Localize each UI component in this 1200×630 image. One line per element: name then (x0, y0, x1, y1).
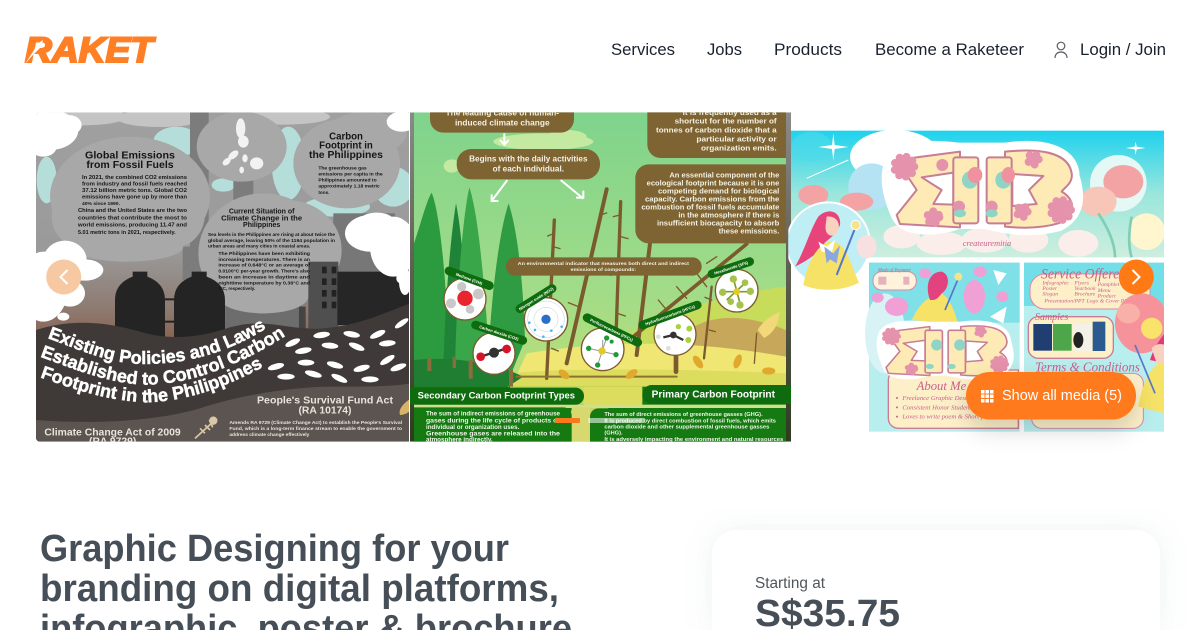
avatar (786, 201, 877, 290)
callout text: Begins with the daily activities (469, 154, 588, 163)
text block: secondary: atmosphere indirectly. (426, 437, 493, 444)
heading: current situation: 1°C, respectively. (218, 286, 255, 291)
heading: carbon footprint: Carbon (329, 131, 363, 142)
text block: secondary (414, 407, 572, 444)
heading: carbon footprint: Philippines amounted to (318, 178, 377, 183)
callout text: The leading cause of human- (446, 108, 559, 117)
molecule: nitrogen oxide (514, 283, 568, 341)
text block: primary: carbon dioxide and other supplemental greenhouse gasses (604, 425, 769, 431)
banner (791, 130, 1165, 257)
handle: createuremitia (963, 239, 1011, 248)
text block: secondary: individual or organization uses. (426, 424, 520, 431)
callout text: induced climate change (455, 118, 550, 127)
callout text: competing demand for biological (658, 187, 779, 195)
curved title: Existing Policies and Laws (48, 321, 265, 364)
clouds (444, 130, 593, 173)
poster: services: Menu (1097, 288, 1111, 294)
poster: services: Samples (1035, 312, 1068, 323)
heading: carbon footprint: emissions per capita in the (318, 171, 383, 176)
brown callouts (430, 112, 786, 276)
philippines map (221, 118, 263, 173)
molecule: carbon dioxide: Carbon dioxide (CO2) (479, 324, 520, 342)
heading: global emissions: countries that contribute the most to (78, 215, 188, 221)
curved title: Established to Control Carbon (40, 329, 286, 385)
buildings (299, 262, 411, 330)
heading: current situation: nighttime temperature by 0.36°C and (218, 280, 310, 285)
heading: global emissions: emissions have gone up by more than (82, 195, 188, 201)
bottom band (414, 387, 786, 442)
laws text: People's Survival Fund Act (257, 396, 394, 407)
poster: about me: About Me (916, 379, 967, 393)
callout text: of each individual. (493, 165, 564, 174)
forest (414, 187, 525, 387)
page title: Graphic Designing for your (40, 528, 509, 570)
callout text: An essential component of the (669, 171, 779, 179)
heading: current situation: Climate Change in the (221, 215, 302, 222)
molecule: methane (443, 265, 495, 320)
carousel progress (555, 418, 644, 423)
callout text: capacity. Carbon emissions from the (645, 195, 779, 203)
callout text: ecological footprint because it is one (647, 179, 779, 187)
callout text: in the atmosphere if there is (678, 211, 779, 219)
nav: services: Services (611, 40, 675, 59)
heading: global emissions: 5.01 metric tons in 2021, respectively. (78, 230, 176, 236)
page title: branding on digital platforms, (40, 568, 559, 610)
callout text: organization emits. (701, 143, 777, 152)
control: next arrow (1119, 260, 1154, 294)
molecule: sulfur hexafluoride: Hexafluoride (SF6) (714, 260, 749, 276)
heading: current situation: increasing temperatures. There is an (218, 257, 310, 262)
arrows (492, 133, 583, 201)
poster: about me: Mode of Payment (877, 268, 911, 273)
callout text: these emissions. (719, 227, 779, 235)
molecule: perfluorocarbons (581, 312, 644, 371)
price card (712, 530, 1160, 630)
callout text: combustion of fossil fuels accumulate (641, 203, 779, 211)
callout text: tonnes of carbon dioxide that a (656, 126, 777, 135)
laws text: (RA 9729) (89, 436, 136, 447)
poster: services: Flyers (1073, 280, 1090, 286)
molecule: perfluorocarbons: Perfluorocarbons (PFCs) (589, 317, 634, 343)
sparkles (818, 133, 1146, 161)
poster: services: Presentation/PPT (1043, 299, 1086, 305)
panel: climate poster (36, 112, 409, 442)
callout text (446, 108, 780, 273)
icon: fish bone (195, 417, 217, 438)
poster: services: Pamphlet (1097, 282, 1120, 288)
leaf (400, 399, 409, 415)
logo: sigma iota beta (889, 148, 1076, 228)
molecule: hydrofluorocarbons (637, 300, 703, 355)
poster: services: Yearbook (1074, 286, 1096, 292)
callout text: It is frequently used as a (683, 108, 777, 117)
icon: user (1055, 42, 1067, 58)
poster: services: Poster (1041, 286, 1058, 292)
lower band (36, 383, 410, 443)
heading: secondary types (403, 388, 584, 405)
curved title: Footprint in the Philippines (40, 360, 262, 403)
laws text: Fund, which is a long-term finance stream to enable the government to (229, 426, 402, 431)
laws text (44, 396, 402, 442)
poster: about me: Freelance Graphic Designer (901, 395, 979, 402)
nav: jobs: Jobs (707, 40, 742, 59)
poster: about me: Consistent Honor Student (902, 404, 971, 411)
poster: services: Product (1097, 293, 1116, 299)
flowers (798, 165, 1143, 217)
text block: primary (590, 408, 786, 443)
poster: services: Service Offered (1041, 266, 1127, 282)
text block: secondary: The sum of indirect emissions of greenhouse (426, 411, 560, 418)
panel: carbon footprint poster (403, 93, 799, 444)
heading: current situation: The Philippines have been exhibiting (218, 251, 310, 256)
callout text: particular activity or (696, 135, 777, 144)
heading: global emissions: 40% since 1990. (82, 201, 121, 207)
heading: carbon footprint (309, 131, 383, 195)
poster: about me (865, 263, 1020, 432)
heading: primary footprint: Primary Carbon Footprint (652, 389, 776, 400)
chimneys (183, 112, 253, 280)
navigation (611, 40, 1166, 59)
nav: products: Products (774, 40, 842, 59)
text block: primary: It is adversely impacting the environment and natural resources (604, 437, 783, 443)
heading: global emissions: In 2021, the combined CO2 emissions (82, 175, 187, 181)
laws text: (RA 10174) (298, 405, 352, 416)
poster: about me: Loves to write poem & Short fiction (901, 414, 998, 421)
nav: login: Login / Join (1080, 40, 1166, 59)
poster: services (1024, 263, 1168, 432)
text block: secondary: Greenhouse gases are released into the (426, 430, 561, 437)
poster: services: Slogan (1042, 292, 1058, 298)
dark wave (36, 303, 410, 443)
icon: grid (981, 390, 994, 402)
molecule: nitrogen oxide: Nitrogen oxide (NO2) (518, 286, 555, 311)
dead trees (517, 189, 757, 378)
heading: current situation: 0.0100°C per-year growth. There's also (218, 269, 310, 274)
text block: primary: (GHG). (604, 431, 623, 437)
poster: services: Brochure (1074, 292, 1096, 298)
heading: current situation: Current Situation of (229, 208, 295, 215)
white clouds (18, 110, 417, 322)
heading: carbon footprint: Footprint in (319, 141, 373, 152)
nav: become a raketeer: Become a Raketeer (875, 40, 1024, 59)
header logo: RAKET (25, 31, 156, 70)
page title (40, 528, 572, 630)
small logo (881, 324, 1010, 376)
molecule: methane: Methane (CH4) (455, 272, 484, 286)
callout text: An environmental indicator that measures both direct and indirect (518, 261, 689, 267)
molecule: hydrofluorocarbons: Hydrofluorocarbons (HFCs) (645, 304, 696, 326)
background hills (622, 286, 786, 344)
callout text: shortcut for the number of (675, 117, 777, 126)
text block: secondary: gases during the life cycle of products or (426, 417, 561, 424)
storage tanks (115, 272, 225, 340)
callout text: insufficient biocapacity to absorb (657, 219, 780, 227)
heading: carbon footprint: tons. (318, 190, 329, 195)
heading: current situation: global average, leaving 50% of the 1194 population in (208, 238, 335, 243)
heading: carbon footprint: approximately 1.18 metric (318, 184, 380, 189)
heading: secondary types: Secondary Carbon Footprint Types (418, 390, 575, 400)
heading: primary footprint (642, 385, 799, 404)
heading: current situation: increase of 0.648°C or an average of (218, 263, 311, 268)
heading: carbon footprint: the Philippines (309, 150, 383, 161)
heading: current situation: urban areas and many cities in coastal areas. (208, 244, 310, 249)
leaves (557, 353, 775, 404)
heading: carbon footprint: The greenhouse gas (318, 165, 367, 170)
molecule: sulfur hexafluoride (707, 256, 758, 312)
callout text: emissions of compounds: (571, 267, 636, 273)
poster: services: Infographic (1041, 279, 1070, 286)
text block: primary: The sum of direct emissions of greenhouse gasses (GHG). (604, 412, 763, 418)
starting label: Starting at (755, 575, 826, 592)
heading: global emissions: from Fossil Fuels (86, 160, 174, 171)
laws text: address climate change effectively (229, 432, 310, 437)
heading: current situation: been an increase in daytime and (218, 275, 310, 280)
heading: current situation (208, 208, 336, 291)
smoke bubbles (50, 112, 407, 313)
laws text: Climate Change Act of 2009 (44, 427, 181, 438)
heading: global emissions: from industry and fossil fuels reached (82, 181, 188, 187)
heading: global emissions: world emissions, producing 11.47 and (77, 223, 188, 229)
button label: Show all media (5) (1002, 387, 1122, 404)
heading: global emissions: China and the United States are the two (78, 208, 188, 214)
heading: global emissions: Global Emissions (85, 150, 175, 161)
laws text: Amends RA 9729 (Climate Change Act) to establish the People's Survival (229, 420, 402, 425)
text block: primary: It is produced by direct combustion of fossil fuels, which emits (604, 418, 776, 424)
heading: current situation: Sea levels in the Philippines are rising at about twice the (208, 232, 336, 237)
button: show all media (966, 372, 1136, 420)
heading: global emissions: 37.12 billion metric tons. Global CO2 (82, 188, 187, 194)
poster: services: Logo & Cover Photo (1086, 299, 1134, 305)
panel: creative portfolio (788, 130, 1164, 432)
control: previous arrow (46, 260, 81, 294)
heading: current situation: Philippines (243, 222, 280, 229)
poster: services: Terms & Conditions (1035, 361, 1141, 376)
molecule: carbon dioxide (470, 320, 528, 374)
heading: global emissions (77, 150, 188, 236)
footprints (267, 317, 410, 385)
